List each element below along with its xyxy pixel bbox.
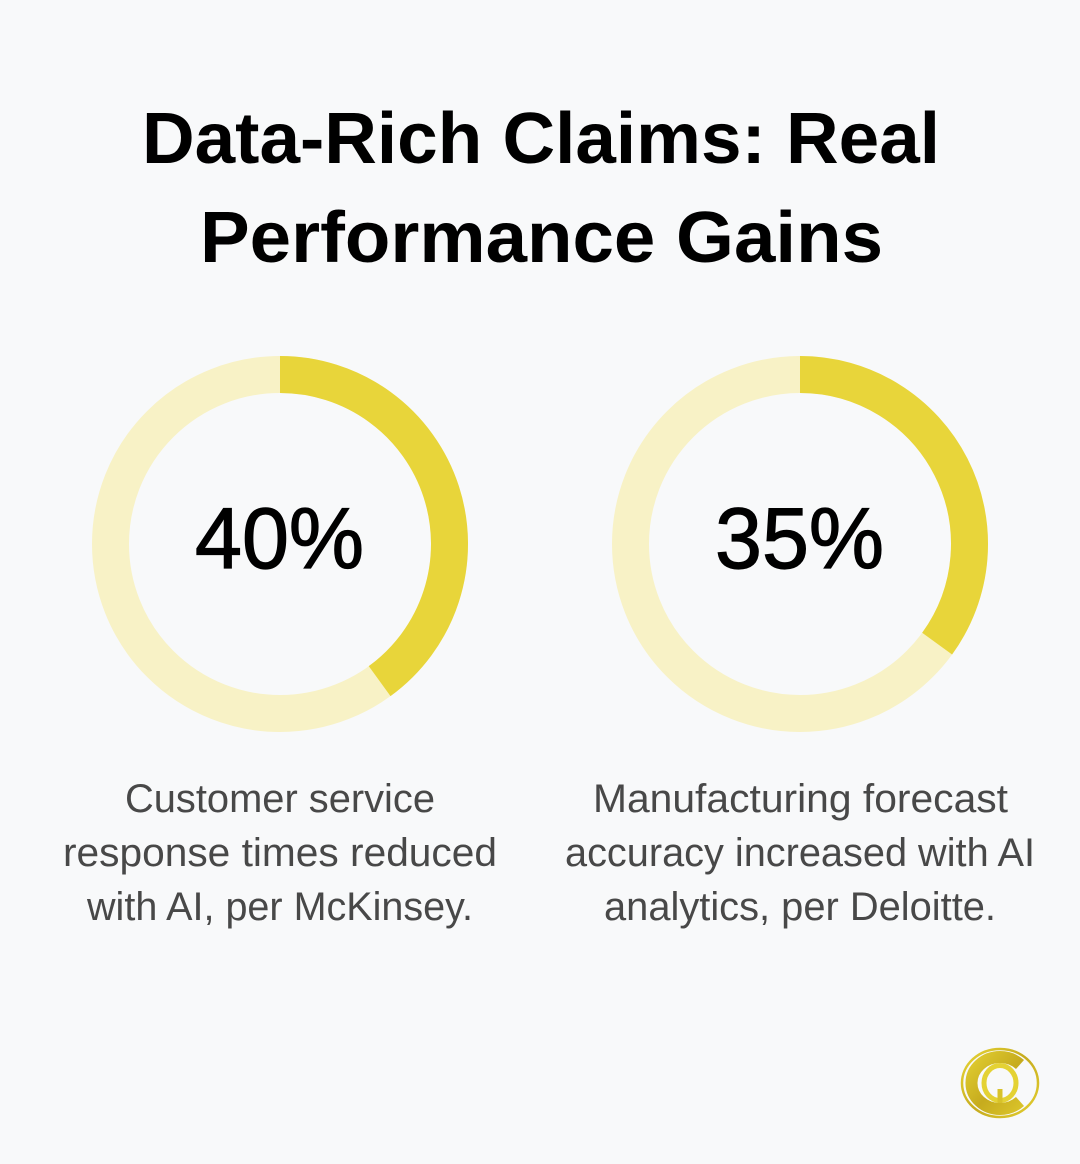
donut chart: 35% bbox=[630, 374, 970, 714]
description: manufacturing: accuracy increased with AI bbox=[565, 831, 1035, 875]
description: customer service: Customer service bbox=[125, 777, 435, 821]
value: 35%: 35% bbox=[715, 491, 884, 587]
value: 40%: 40% bbox=[195, 491, 364, 587]
donut chart: 40% bbox=[110, 374, 450, 714]
title: Performance Gains bbox=[200, 198, 883, 278]
description: customer service: with AI, per McKinsey. bbox=[86, 885, 473, 929]
panel: manufacturing stat bbox=[565, 374, 1035, 929]
description: customer service: response times reduced bbox=[63, 831, 497, 875]
title bbox=[142, 99, 940, 278]
description: manufacturing bbox=[565, 777, 1035, 929]
title: Data-Rich Claims: Real bbox=[142, 99, 940, 179]
description: manufacturing: Manufacturing forecast bbox=[593, 777, 1008, 821]
icon: gold logo bbox=[962, 1049, 1038, 1117]
description: customer service bbox=[63, 777, 497, 929]
description: manufacturing: analytics, per Deloitte. bbox=[604, 885, 996, 929]
panel: customer service stat bbox=[63, 374, 497, 929]
